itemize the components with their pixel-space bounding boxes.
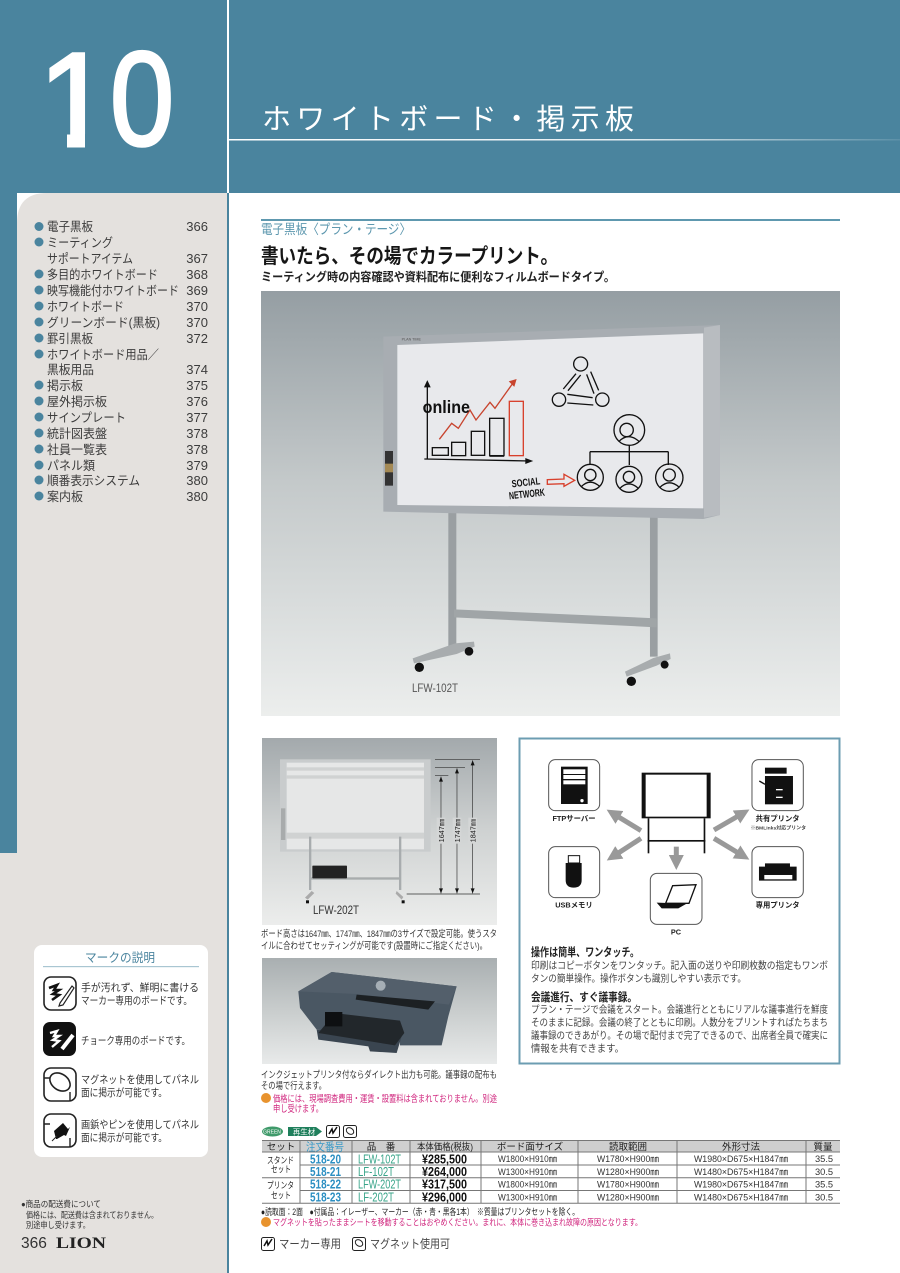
sidebar contents list: 374 (186, 362, 208, 377)
sidebar contents list: サポートアイテム (47, 252, 133, 266)
sidebar contents list: 多目的ホワイトボード (47, 267, 158, 282)
icon: dedicated printer (752, 847, 803, 910)
row group labels: スタンド (267, 1156, 294, 1166)
photo: LFW-202T with height dimensions: 1847㎜ (469, 818, 478, 842)
bottom icon key: マーカー専用 (279, 1237, 341, 1251)
sidebar contents list: 電子黒板 (47, 220, 93, 234)
sidebar contents list: 370 (186, 315, 208, 330)
order numbers: 518-22 (310, 1176, 341, 1192)
sidebar contents list: 378 (186, 426, 208, 441)
caption: printer: インクジェットプリンタ付ならダイレクト出力も可能。議事録の配布も (261, 1069, 497, 1081)
panel: mark legend (34, 945, 208, 1157)
specifications: 30.5 (815, 1192, 833, 1202)
page number and brand (21, 1235, 106, 1252)
table header: 質量 (813, 1141, 833, 1153)
sidebar contents list: 369 (186, 283, 208, 298)
table footnote: ●読取面：2面 ●付属品：イレーザー、マーカー（赤・青・黒各1本） ※質量はプリンタセットを除く。 (261, 1206, 579, 1217)
bottom icon key (262, 1236, 450, 1251)
arrows (614, 814, 742, 861)
sidebar contents list: 368 (186, 267, 208, 282)
page divider (227, 0, 900, 1273)
order numbers: 518-23 (310, 1190, 341, 1204)
panel: mark legend: 面に掲示が可能です。 (81, 1086, 167, 1099)
whiteboard with sketches: online (423, 397, 470, 417)
sidebar contents list: 376 (186, 394, 208, 409)
product heading (261, 219, 840, 284)
spec icons row (262, 1126, 356, 1138)
model numbers: LFW-202T (358, 1176, 401, 1192)
chapter number: 1 (38, 26, 113, 175)
specifications: W1800×H910㎜ (498, 1154, 557, 1164)
icon: shared printer: 共有プリンタ (756, 814, 800, 823)
sidebar contents list: 黒板用品 (47, 363, 94, 377)
table header: 品 番 (367, 1141, 396, 1153)
icon: USB memory: USBメモリ (555, 901, 593, 910)
panel: mark legend: マグネットを使用してパネル (81, 1073, 199, 1086)
order numbers: 518-21 (310, 1164, 341, 1179)
order numbers: 518-20 (310, 1152, 341, 1166)
table header: 読取範囲 (609, 1141, 647, 1153)
sidebar contents list: ホワイトボード用品／ (47, 348, 159, 362)
photo: LFW-202T with height dimensions: 1647㎜ (437, 818, 446, 842)
sidebar contents list: 378 (186, 442, 208, 457)
page number and brand: 366 (21, 1235, 47, 1252)
table header: ボード面サイズ (497, 1141, 564, 1153)
specifications: 35.5 (815, 1180, 833, 1190)
sidebar contents list: 380 (186, 473, 208, 488)
spec icons row: 再生材 (293, 1126, 316, 1136)
table caution: マグネットを貼ったままシートを移動することはおやめください。まれに、本体に巻き込まれ故障の原因となります。 (273, 1216, 642, 1228)
sidebar contents list: 379 (186, 458, 208, 473)
icon: PC (650, 873, 702, 936)
specifications: W1300×H910㎜ (498, 1192, 557, 1202)
sidebar contents list: 社員一覧表 (47, 442, 107, 457)
icon: shared printer: ※BMLinks対応プリンタ (750, 825, 806, 832)
main product photo LFW-102T (261, 291, 840, 716)
row group labels: セット (271, 1190, 291, 1200)
caution note: 申し受けます。 (273, 1103, 323, 1115)
prices: ¥317,500 (422, 1176, 467, 1192)
header band (0, 0, 900, 853)
photo: LFW-202T with height dimensions: LFW-202T (313, 905, 359, 917)
table header (267, 1140, 833, 1154)
specifications: 30.5 (815, 1167, 833, 1177)
table header: 外形寸法 (722, 1141, 760, 1153)
panel: mark legend: マーカー専用のボードです。 (81, 995, 192, 1007)
prices: ¥264,000 (422, 1164, 467, 1179)
specifications: W1300×H910㎜ (498, 1167, 557, 1177)
whiteboard with sketches: PLAN TIME (402, 338, 421, 342)
panel: mark legend: マークの説明 (85, 950, 155, 965)
specifications: W1480×D675×H1847㎜ (694, 1167, 788, 1177)
specifications: W1780×H900㎜ (597, 1154, 659, 1164)
spec icons row: GREEN (263, 1130, 281, 1136)
delivery note (21, 1199, 158, 1230)
order numbers (310, 1152, 341, 1204)
specifications: W1780×H900㎜ (597, 1180, 659, 1190)
social network label: NETWORK (508, 488, 546, 502)
model numbers: LFW-102T (358, 1152, 401, 1166)
product heading: 電子黒板〈プラン・テージ〉 (261, 222, 411, 237)
bottom icon key: マグネット使用可 (370, 1236, 450, 1251)
panel: mark legend: チョーク専用のボードです。 (81, 1035, 190, 1047)
sidebar contents list: 掲示板 (47, 378, 83, 393)
specifications: W1480×D675×H1847㎜ (694, 1192, 788, 1202)
photo: inkjet printer (262, 958, 497, 1064)
caution note: 価格には、現場調査費用・運賃・設置料は含まれておりません。別途 (273, 1093, 497, 1105)
sidebar contents list: 372 (186, 331, 208, 346)
caption: board height: イルに合わせてセッティングが可能です(設置時にご指定ください)。 (261, 940, 487, 952)
product heading: ミーティング時の内容確認や資料配布に便利なフィルムボードタイプ。 (261, 269, 615, 284)
sidebar contents list: サインプレート (47, 411, 126, 425)
page number and brand: LION (56, 1235, 106, 1252)
feature text: minutes: 会議進行、すぐ議事録。 (531, 990, 637, 1004)
sidebar contents list: 順番表示システム (47, 474, 140, 488)
specifications (498, 1154, 833, 1202)
caption: board height (261, 928, 497, 952)
panel: mark legend: 手が汚れず、鮮明に書ける (81, 981, 199, 994)
sidebar panel background (0, 193, 227, 1273)
icon: shared printer (750, 760, 806, 832)
table header: 本体価格(税抜) (417, 1141, 473, 1153)
specifications: 35.5 (815, 1154, 833, 1164)
row group labels: セット (271, 1164, 291, 1174)
model label: LFW-102T (412, 683, 458, 695)
sidebar contents list: 366 (186, 219, 208, 234)
whiteboard pictogram (642, 773, 711, 853)
table header: セット (267, 1142, 295, 1153)
chapter number (38, 25, 174, 175)
feature text: minutes: 議事録のできあがり。その場で配付まで完了できるので、出席者全員で確実に (531, 1029, 828, 1042)
social network label (508, 476, 546, 502)
specifications: W1980×D675×H1847㎜ (694, 1154, 788, 1164)
sidebar contents list: パネル類 (47, 459, 95, 473)
sidebar contents list: 統計図表盤 (47, 426, 107, 441)
feature text: one touch (531, 945, 828, 985)
caption: printer (261, 1069, 497, 1092)
panel: connectivity diagram and features (520, 738, 840, 1064)
table header: 注文番号 (306, 1140, 344, 1154)
feature text: one touch: 操作は簡単、ワンタッチ。 (531, 945, 639, 959)
panel: mark legend: 画鋲やピンを使用してパネル (81, 1118, 199, 1131)
specifications: W1800×H910㎜ (498, 1180, 557, 1190)
feature text: minutes: そのままに記録。会議の終了とともに印刷。人数分をプリントすればたちまち (531, 1016, 828, 1029)
sidebar contents list: グリーンボード(黒板) (47, 316, 160, 330)
icon: FTP server: FTPサーバー (552, 814, 596, 823)
specifications: W1980×D675×H1847㎜ (694, 1180, 788, 1190)
sidebar contents list: ホワイトボード (47, 300, 124, 314)
sidebar contents list: 375 (186, 378, 208, 393)
photo: LFW-202T with height dimensions: 1747㎜ (453, 818, 462, 842)
sidebar contents list: 367 (186, 251, 208, 266)
feature text: one touch: タンの簡単操作。操作ボタンも識別しやすい表示です。 (531, 972, 746, 985)
feature text: one touch: 印刷はコピーボタンをワンタッチ。記入面の送りや印刷枚数の指定もワンボ (531, 959, 828, 972)
sidebar contents list: 映写機能付ホワイトボード (47, 283, 179, 298)
sidebar contents list: ミーティング (47, 236, 113, 250)
caption: printer: その場で行えます。 (261, 1080, 326, 1092)
sidebar contents list: 罫引黒板 (47, 332, 93, 346)
model numbers (358, 1152, 401, 1204)
social network label: SOCIAL (511, 476, 541, 490)
feature text: minutes: 情報を共有できます。 (531, 1042, 624, 1055)
sidebar contents list: 377 (186, 410, 208, 425)
photo: LFW-202T with height dimensions (262, 738, 497, 925)
model numbers: LF-102T (358, 1164, 394, 1179)
caption: board height: ボード高さは1647㎜、1747㎜、1847㎜の3サイズで設定可能。使うスタ (261, 928, 497, 940)
prices: ¥296,000 (422, 1190, 467, 1204)
chapter title: ホワイトボード・掲示板 (262, 103, 634, 136)
row group labels: プリンタ (267, 1180, 294, 1190)
caution note (261, 1093, 497, 1115)
delivery note: 別途申し受けます。 (26, 1220, 90, 1230)
icon: dedicated printer: 専用プリンタ (756, 901, 800, 910)
sidebar contents list: 案内板 (47, 490, 83, 504)
icon: FTP server (549, 760, 600, 823)
row group labels (267, 1156, 294, 1200)
feature text: minutes: プラン・テージで会議をスタート。会議進行とともにリアルな議事進行を鮮度 (531, 1003, 828, 1016)
sidebar contents list: 380 (186, 489, 208, 504)
sidebar contents list: 370 (186, 299, 208, 314)
chapter number: 0 (110, 25, 174, 174)
chart sketch (424, 380, 531, 463)
triangle network sketch (552, 357, 683, 492)
specifications: W1280×H900㎜ (597, 1167, 659, 1177)
icon: USB memory (549, 847, 600, 910)
delivery note: ●商品の配送費について (21, 1199, 101, 1209)
feature text: minutes (531, 990, 828, 1055)
product heading: 書いたら、その場でカラープリント。 (261, 245, 558, 268)
panel: mark legend: 面に掲示が可能です。 (81, 1131, 167, 1144)
delivery note: 価格には、配送費は含まれておりません。 (26, 1210, 158, 1220)
board stand (413, 507, 671, 686)
icon: PC: PC (671, 927, 682, 936)
whiteboard with sketches (383, 325, 720, 519)
model numbers: LF-202T (358, 1190, 394, 1204)
specifications: W1280×H900㎜ (597, 1192, 659, 1202)
prices (422, 1152, 467, 1204)
sidebar contents list (34, 219, 208, 504)
prices: ¥285,500 (422, 1152, 467, 1166)
sidebar contents list: 屋外掲示板 (47, 394, 107, 409)
price table (262, 1140, 840, 1204)
